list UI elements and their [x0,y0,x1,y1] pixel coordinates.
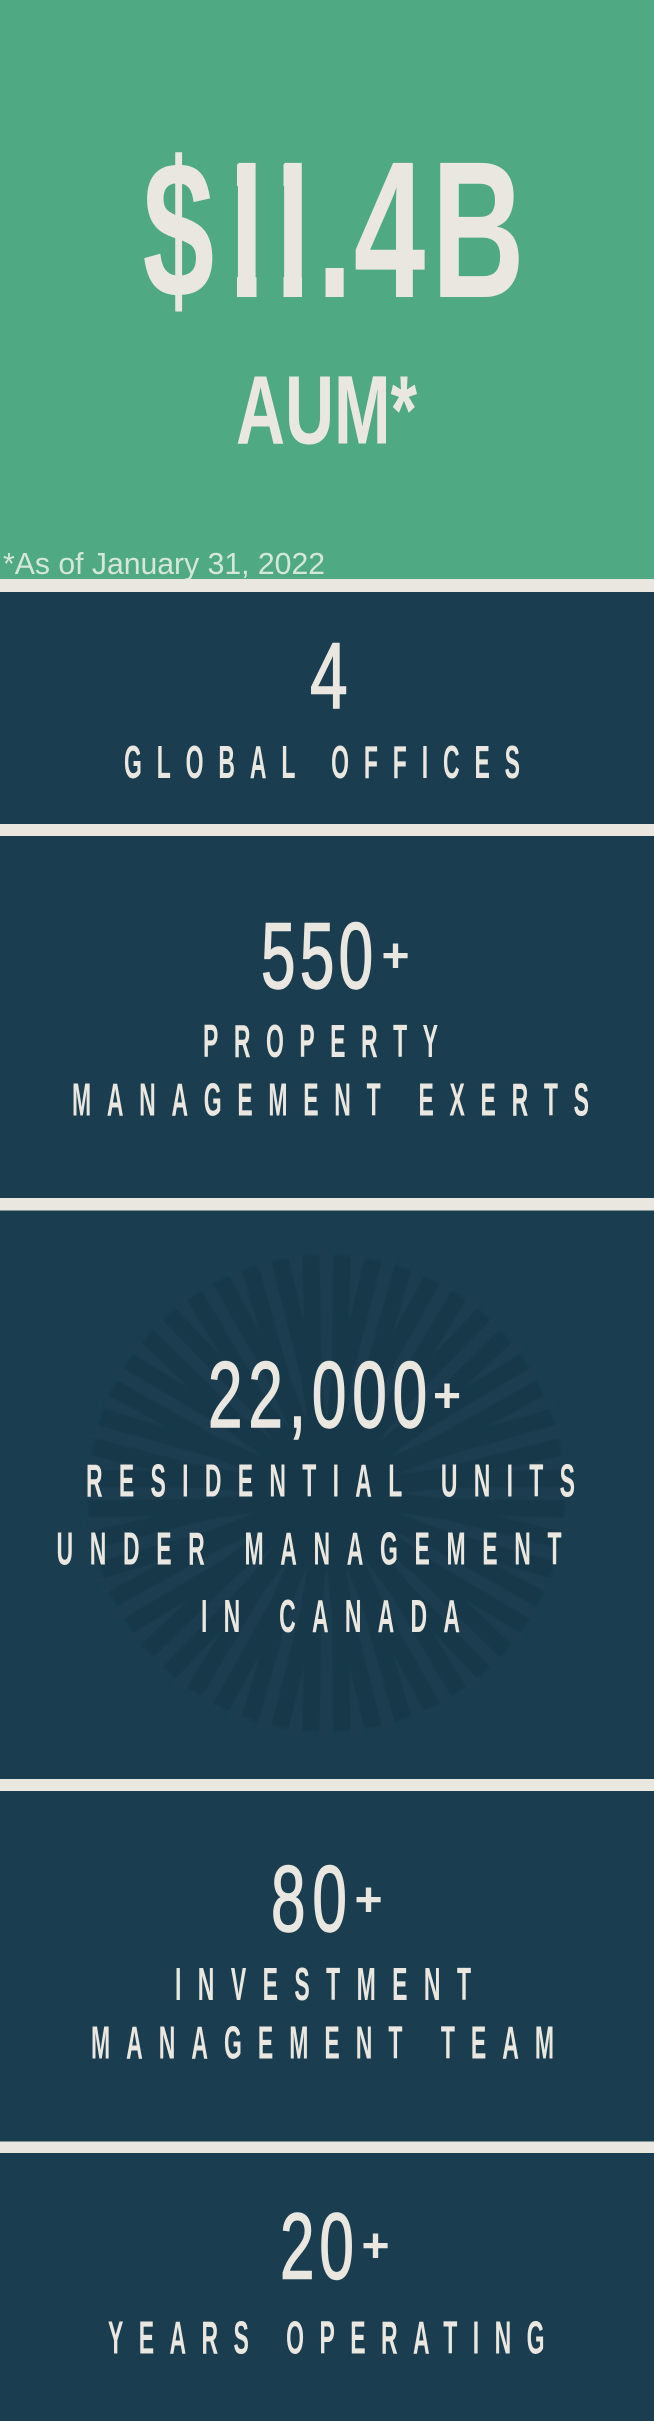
label: residential units: RESIDENTIAL UNITS [86,1455,575,1507]
sunburst background [80,1248,572,1740]
figure: 4: 4 [310,624,348,729]
headline figure: $11.4B: 1 [208,121,279,339]
label: global offices: GLOBAL OFFICES [124,736,520,788]
figure: 22,000+: + [433,1370,461,1423]
label: years operating: YEARS OPERATING [108,2312,544,2364]
label: property: PROPERTY [203,1015,438,1067]
headline figure: $11.4B [144,152,519,312]
headline figure: $11.4B: 4 [354,121,425,339]
figure: 20+: + [361,2220,390,2273]
figure: 22,000+: 22,000 [208,1342,427,1447]
figure: 550+: + [381,930,410,983]
figure: 80+: + [354,1874,383,1927]
headline figure: $11.4B: $ [143,121,214,339]
label: under management: UNDER MANAGEMENT [56,1523,562,1575]
headline figure: $11.4B: B [432,121,525,339]
headline figure: $11.4B: . [317,121,353,339]
figure: 80+ [271,1846,383,1951]
figure: 20+: 20 [280,2194,354,2299]
panel: years operating [0,2153,654,2421]
figure: 20+ [280,2194,390,2299]
label: in Canada: IN CANADA [201,1590,460,1642]
label: AUM: AUM* [236,356,417,464]
panel: assets under management [0,0,654,581]
figure: 550+: 550 [261,903,373,1008]
headline figure: $11.4B: 1 [254,121,326,339]
label: management team: MANAGEMENT TEAM [91,2017,554,2069]
panel: residential units [0,1210,654,1779]
panel: global offices [0,592,654,824]
panel: property management experts [0,836,654,1198]
panel: investment management team [0,1791,654,2142]
label: investment: INVESTMENT [175,1958,471,2010]
footnote: date: *As of January 31, 2022 [3,546,325,581]
label: management exerts: MANAGEMENT EXERTS [72,1074,589,1126]
figure: 80+: 80 [271,1846,347,1951]
